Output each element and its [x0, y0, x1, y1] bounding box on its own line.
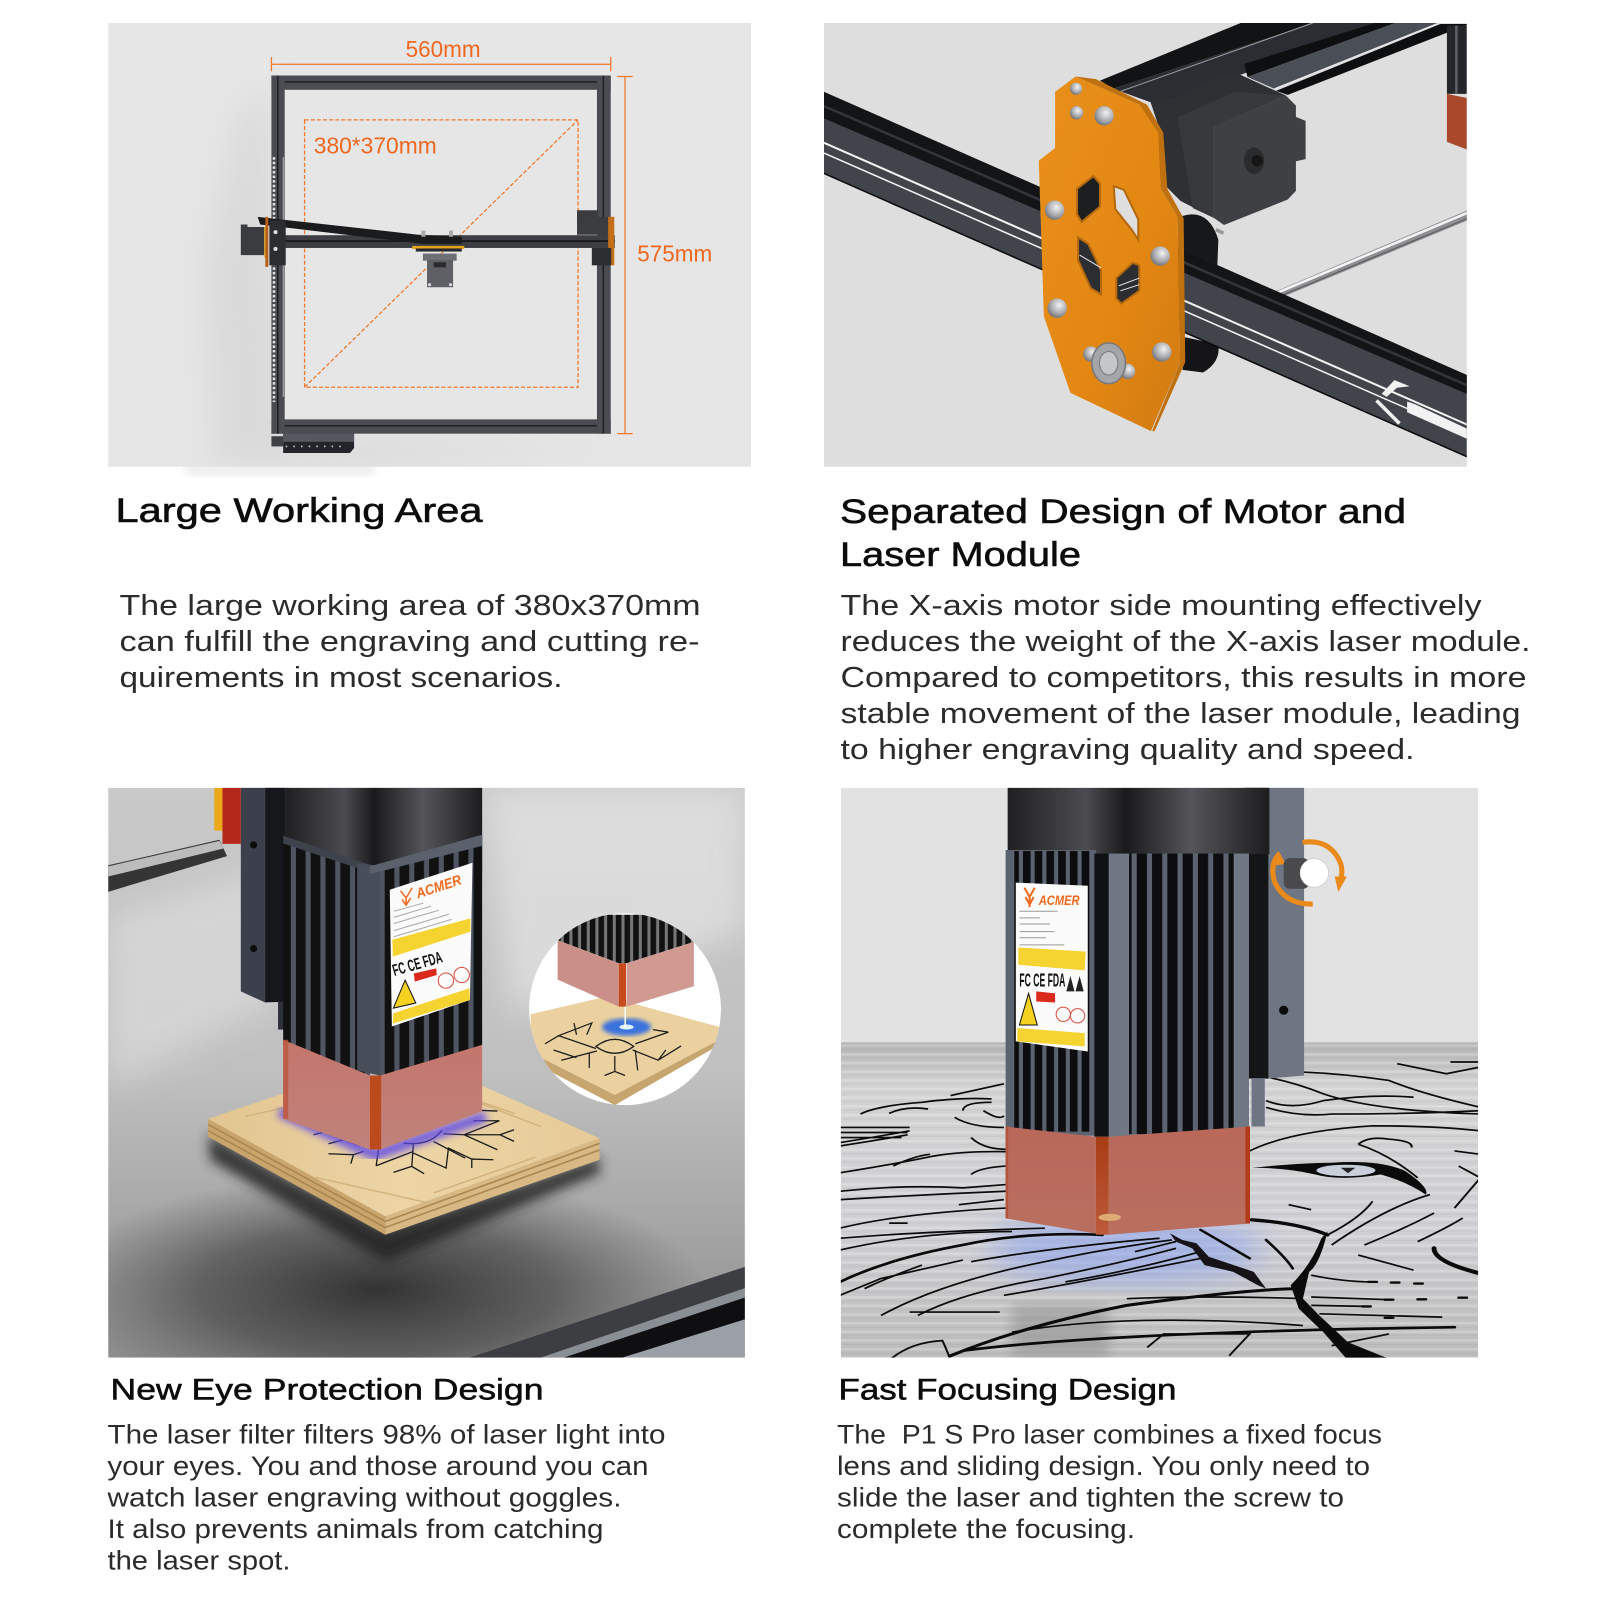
laser glow — [280, 1111, 486, 1155]
inset filter — [558, 940, 619, 1007]
stepper motor — [1150, 75, 1306, 225]
corner strip — [357, 864, 390, 1078]
product label — [390, 863, 472, 1027]
left stepper motor — [241, 217, 286, 267]
body text: separated design: Compared to competitors, this results in more — [840, 662, 1526, 694]
working area illustration — [108, 23, 751, 467]
left heatsink face — [283, 836, 370, 1078]
body text: fast focusing: complete the focusing. — [837, 1514, 1135, 1544]
red filter right — [380, 1045, 482, 1149]
bearing — [1092, 343, 1126, 384]
fan shroud — [286, 788, 482, 872]
laser head top view — [423, 254, 457, 287]
upper background — [841, 788, 1478, 1043]
heading: new eye protection: New Eye Protection Design — [110, 1374, 544, 1406]
black cheek shape — [1170, 1233, 1266, 1289]
eye protection illustration — [108, 788, 745, 1358]
image background — [108, 23, 751, 467]
right heatsink face — [380, 835, 482, 1078]
side bracket — [1244, 788, 1304, 1079]
inset detail circle — [529, 913, 721, 1105]
heading: separated design — [840, 493, 1406, 574]
heading: separated design: Separated Design of Motor and — [840, 493, 1406, 531]
corner strip — [1094, 854, 1110, 1137]
height dimension line — [617, 77, 633, 434]
steel rod — [108, 840, 227, 892]
body text: new eye protection — [106, 1420, 666, 1576]
panel: separated design — [824, 23, 1530, 766]
body text: separated design: The X-axis motor side mounting effectively — [840, 590, 1482, 622]
fast focusing illustration — [840, 788, 1480, 1360]
label: 575mm: 575mm — [637, 241, 712, 267]
metal table background — [108, 788, 745, 1358]
table edge rail — [469, 1267, 745, 1358]
inset snowflake — [545, 1023, 681, 1076]
motor pulley — [1180, 214, 1223, 372]
plywood board — [208, 1086, 599, 1235]
yellow and red carriage — [214, 788, 241, 844]
heading: separated design: Laser Module — [840, 536, 1081, 574]
circle base — [529, 913, 721, 1105]
filter edge — [1096, 1137, 1109, 1235]
image background — [824, 23, 1467, 467]
filter left — [1006, 1127, 1096, 1234]
red filter left — [283, 1040, 370, 1149]
laser reflection on sheet — [1012, 1305, 1109, 1358]
body text: separated design: stable movement of the laser module, leading — [840, 698, 1520, 730]
body text: fast focusing: slide the laser and tighten the screw to — [837, 1482, 1344, 1512]
machine frame — [271, 76, 611, 434]
orange mounting plate — [1039, 77, 1180, 431]
body text: separated design: to higher engraving quality and speed. — [840, 734, 1414, 766]
body text: large working area: can fulfill the engraving and cutting re- — [120, 626, 700, 658]
body text: fast focusing: The P1 S Pro laser combines a fixed focus — [837, 1420, 1382, 1450]
product label: FC CE FDA — [1019, 970, 1065, 991]
rear y-axis rail — [1100, 23, 1469, 105]
x-axis gantry — [258, 217, 615, 252]
filter right — [1109, 1127, 1250, 1235]
width dimension line — [271, 57, 611, 71]
side bracket — [241, 788, 286, 1003]
filter edge — [370, 1076, 381, 1149]
faint shadow below image — [185, 462, 375, 476]
body text: new eye protection: The laser filter filters 98% of laser light into — [108, 1420, 666, 1450]
blue laser glow — [989, 1213, 1264, 1285]
laser module — [214, 788, 482, 1149]
inset board — [531, 996, 719, 1095]
steel rod — [1274, 210, 1469, 297]
right frame upright — [1447, 26, 1467, 149]
body text: separated design — [840, 590, 1530, 766]
inset fins — [558, 915, 694, 963]
orange plate side edge — [1076, 77, 1185, 431]
label: 380*370mm: 380*370mm — [314, 133, 437, 159]
motor and plate illustration — [824, 23, 1469, 467]
plate screws — [1045, 83, 1171, 379]
body text: large working area — [120, 590, 700, 694]
right stepper motor — [577, 210, 614, 265]
label: 560mm: 560mm — [406, 36, 481, 62]
laser module — [1006, 788, 1304, 1235]
board shadow — [208, 1134, 599, 1262]
bracket hole — [1279, 1006, 1288, 1015]
body text: large working area: The large working area of 380x370mm — [120, 590, 700, 622]
engraved tiger artwork — [840, 1062, 1480, 1360]
body text: fast focusing: lens and sliding design. You only need to — [837, 1451, 1370, 1481]
panel: new eye protection design — [51, 788, 745, 1576]
tiger eye — [1252, 1162, 1426, 1195]
body text: fast focusing — [837, 1420, 1382, 1544]
thin line work — [840, 1062, 1480, 1360]
body text: large working area: quirements in most scenarios. — [120, 662, 562, 694]
product label: ACMER — [413, 872, 464, 903]
body text: new eye protection: It also prevents animals from catching — [108, 1514, 604, 1544]
heading: large working area: Large Working Area — [116, 492, 483, 530]
bold brush strokes — [840, 1220, 1480, 1356]
panel: large working area — [108, 23, 751, 694]
heading: fast focusing: Fast Focusing Design — [838, 1374, 1176, 1406]
metal sheet — [841, 1042, 1478, 1358]
engraved snowflake — [314, 1110, 514, 1174]
left heatsink face — [1006, 850, 1096, 1136]
laser spot in filter — [1098, 1214, 1121, 1221]
product label: ACMER — [1038, 893, 1080, 909]
body text: new eye protection: watch laser engraving without goggles. — [106, 1482, 622, 1512]
focus knob with rotation arrows — [1270, 842, 1347, 904]
product label: FC CE FDA — [391, 948, 445, 980]
dashed engraving area — [305, 120, 578, 387]
black spine of tiger nose — [1291, 1232, 1393, 1360]
right heatsink face — [1109, 854, 1249, 1137]
body text: new eye protection: the laser spot. — [108, 1546, 290, 1576]
front x-axis rail — [824, 92, 1467, 457]
body text: new eye protection: your eyes. You and those around you can — [108, 1451, 648, 1481]
body text: separated design: reduces the weight of the X-axis laser module. — [840, 626, 1530, 658]
control board — [271, 434, 354, 453]
panel: fast focusing design — [837, 788, 1480, 1544]
inset laser spot — [602, 1018, 651, 1036]
frame drop shadow — [212, 126, 341, 459]
product label — [1016, 883, 1088, 1052]
fan shroud — [1008, 788, 1269, 854]
